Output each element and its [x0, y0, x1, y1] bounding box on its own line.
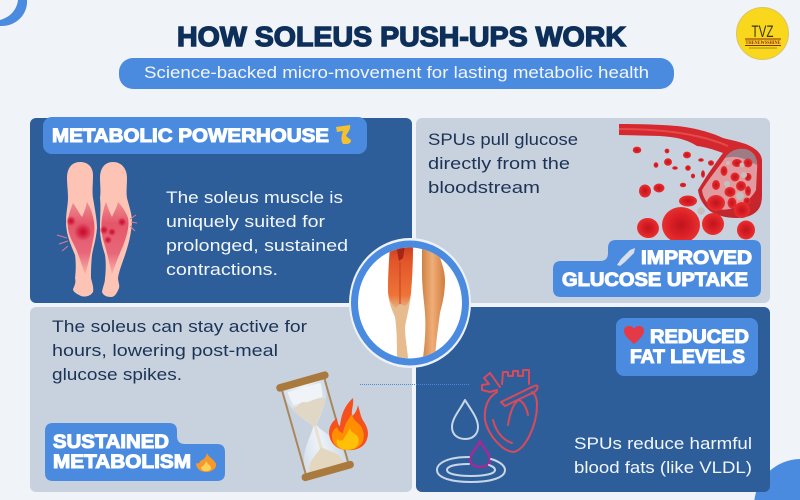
panel: sustained metabolism — [30, 307, 412, 492]
text: soleus description: prolonged, sustained — [166, 236, 348, 255]
corner decoration: top left arc — [0, 0, 27, 26]
text: glucose description — [428, 130, 578, 197]
subtitle banner — [119, 58, 674, 89]
text: soleus description: The soleus muscle is — [166, 188, 343, 207]
panel: metabolic powerhouse — [30, 117, 412, 303]
text: glucose description: directly from the — [428, 154, 570, 173]
logo — [736, 8, 788, 60]
label: metabolic powerhouse: METABOLIC POWERHOUSE — [52, 125, 329, 147]
text: sustained description: hours, lowering post-meal — [52, 341, 278, 360]
logo: TVZ — [752, 22, 774, 41]
label: improved glucose uptake: IMPROVED — [641, 247, 752, 269]
illustration: calves — [57, 162, 137, 297]
logo: THENEWSSHINE — [746, 41, 781, 46]
label: sustained metabolism: SUSTAINED — [53, 431, 169, 453]
illustration: skin leg — [422, 245, 445, 358]
panel: improved glucose uptake — [416, 118, 770, 303]
icon: flame — [329, 398, 368, 450]
label: reduced fat levels: FAT LEVELS — [630, 346, 745, 368]
dotted connector line — [360, 384, 470, 386]
text: fat description: SPUs reduce harmful — [574, 434, 752, 453]
panel: reduced fat levels — [416, 307, 770, 492]
label: improved glucose uptake — [553, 240, 761, 297]
subtitle banner: Science-backed micro-movement for lasting metabolic health — [144, 63, 649, 82]
text: sustained description: glucose spikes. — [52, 365, 182, 384]
label: improved glucose uptake: GLUCOSE UPTAKE — [562, 269, 748, 291]
label: reduced fat levels — [616, 318, 758, 376]
label: reduced fat levels: REDUCED — [650, 326, 749, 348]
text: soleus description: contractions. — [166, 260, 278, 279]
text: fat description — [574, 434, 752, 477]
icon: flame emoji — [196, 453, 216, 472]
illustration: muscle leg — [388, 245, 413, 358]
icon: syringe — [617, 248, 635, 266]
center image: legs in circle — [349, 238, 471, 368]
text: sustained description: The soleus can stay active for — [52, 317, 307, 336]
text: soleus description: uniquely suited for — [166, 212, 325, 231]
text: sustained description — [52, 317, 307, 384]
illustration: heart with drops — [437, 370, 538, 482]
illustration: blood vessel — [619, 124, 762, 243]
title: HOW SOLEUS PUSH-UPS WORK — [177, 21, 626, 52]
illustration: hourglass — [275, 371, 355, 482]
text: glucose description: bloodstream — [428, 178, 540, 197]
text: soleus description — [166, 188, 348, 279]
label: sustained metabolism: METABOLISM — [53, 451, 191, 473]
icon: heart — [624, 326, 644, 344]
text: fat description: blood fats (like VLDL) — [574, 458, 752, 477]
label: metabolic powerhouse — [43, 117, 367, 154]
corner decoration: bottom right circle — [754, 459, 800, 500]
label: sustained metabolism — [45, 423, 225, 481]
text: glucose description: SPUs pull glucose — [428, 130, 578, 149]
icon: leg emoji — [336, 125, 351, 144]
